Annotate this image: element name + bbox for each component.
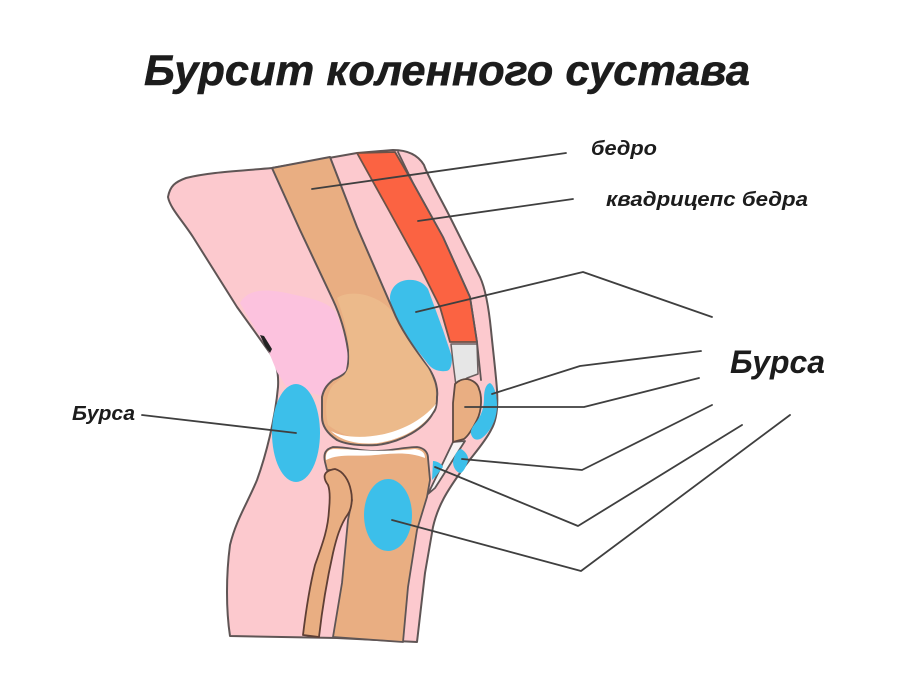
fibula	[303, 469, 352, 637]
bursa: deep	[432, 461, 443, 480]
label: bursa right: Бурса	[730, 344, 825, 380]
bursa: prepatellar	[471, 383, 497, 440]
dark smudge	[260, 335, 272, 353]
outer tendon line	[398, 152, 481, 380]
bursa: suprapatellar	[390, 280, 452, 371]
title: Бурсит коленного сустава	[144, 47, 750, 95]
lighter pink patch	[240, 290, 349, 396]
patella	[453, 379, 481, 442]
label: quadriceps: квадрицепс бедра	[606, 189, 808, 211]
femur lighter lower part	[326, 294, 436, 439]
quadriceps muscle	[357, 152, 477, 342]
femur cartilage	[331, 404, 436, 443]
femur	[272, 157, 437, 445]
bursa: tibial	[364, 479, 412, 551]
tibia	[324, 447, 430, 642]
leader lines	[142, 153, 790, 571]
label: thigh: бедро	[591, 138, 657, 160]
patellar tendon	[428, 441, 465, 494]
skin and soft tissue	[168, 150, 497, 642]
tibia cartilage	[326, 449, 425, 460]
bursa: infrapatellar	[453, 449, 468, 473]
fat pad	[451, 344, 478, 386]
label: bursa left: Бурса	[72, 403, 135, 425]
bursa: left	[272, 384, 320, 482]
knee joint diagram	[168, 150, 497, 642]
